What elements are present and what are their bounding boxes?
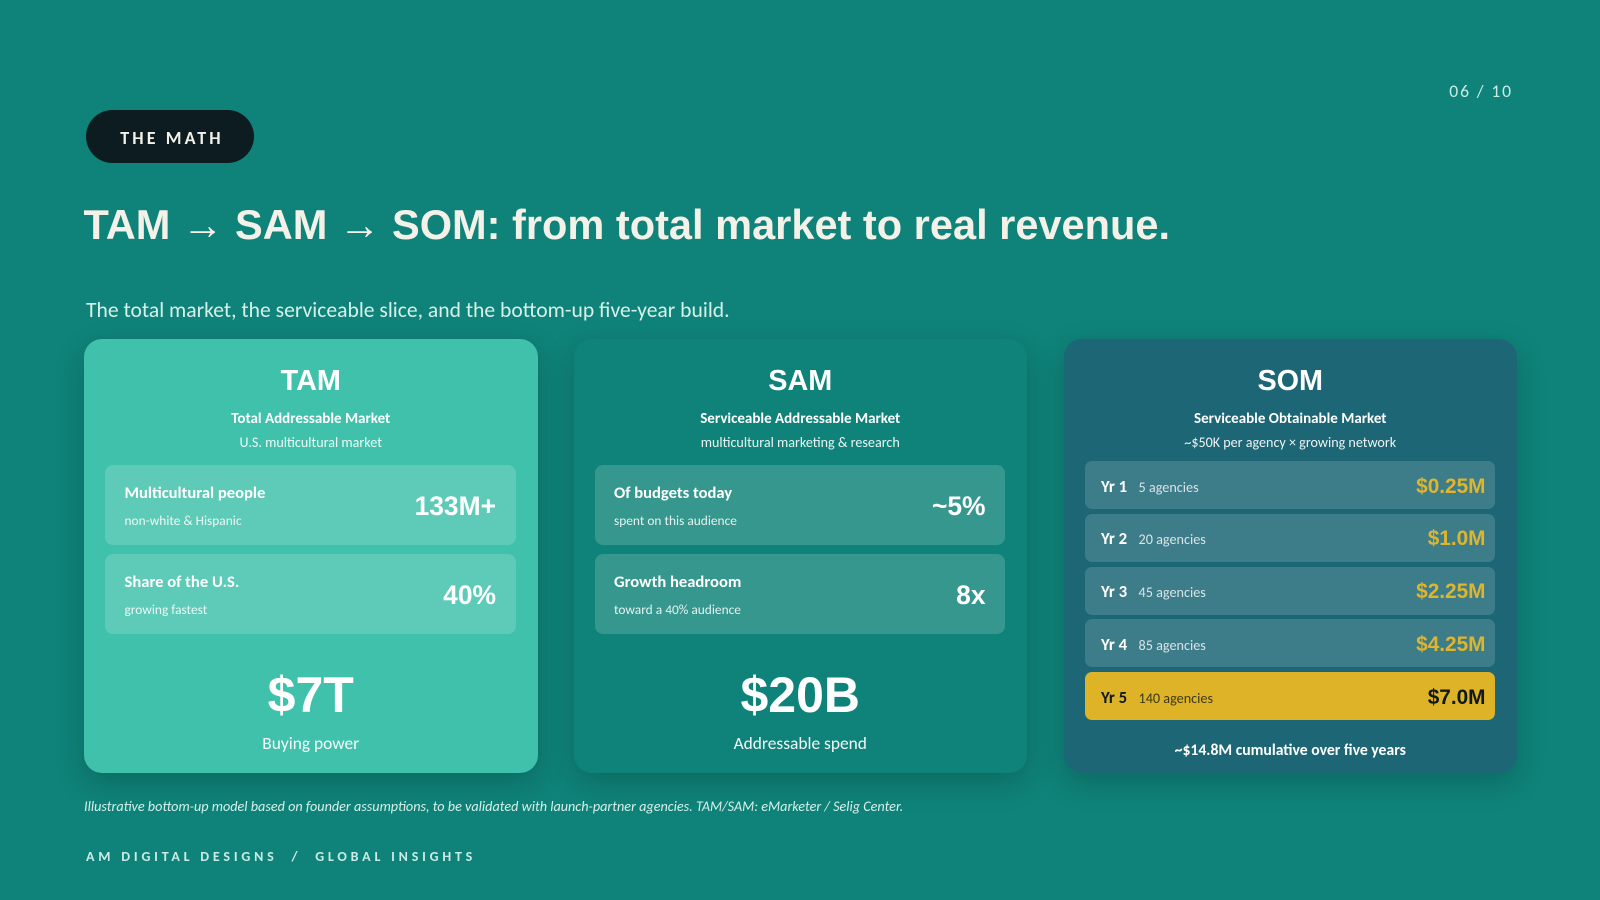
SOM heading: SOM bbox=[1257, 364, 1323, 396]
page number: 06 / 10 bbox=[1449, 80, 1513, 102]
year row 1: 5 agencies bbox=[1138, 478, 1199, 496]
SAM heading: SAM bbox=[768, 364, 832, 396]
footnote: Illustrative bottom-up model based on founder assumptions, to be validated with launch-partner agencies. TAM/SAM: eMarketer / Selig Center. bbox=[84, 797, 903, 815]
TAM heading: TAM bbox=[281, 364, 341, 396]
panel: TAM bbox=[84, 338, 538, 773]
year row 5 highlighted: Yr 5 bbox=[1101, 686, 1127, 708]
year row 2 bbox=[1084, 514, 1495, 562]
year row 1 bbox=[1084, 461, 1495, 509]
stat row: share of the U.S.: 40% bbox=[443, 580, 496, 610]
stat row: growth headroom: 8x bbox=[956, 580, 986, 610]
year row 4: 85 agencies bbox=[1138, 636, 1206, 654]
year row 1: Yr 1 bbox=[1101, 476, 1127, 496]
SAM full name: Serviceable Addressable Market bbox=[700, 410, 900, 428]
year row 5 highlighted: $7.0M bbox=[1428, 686, 1486, 708]
stat row: share of the U.S. bbox=[105, 554, 516, 634]
stat row: budgets today: ~5% bbox=[932, 491, 986, 521]
year row 1: $0.25M bbox=[1416, 474, 1486, 498]
year row 3: Yr 3 bbox=[1101, 581, 1127, 602]
year row 2: Yr 2 bbox=[1101, 528, 1127, 549]
title: TAM → SAM → SOM: from total market to real revenue. bbox=[84, 201, 1170, 248]
stat row: growth headroom: Growth headroom bbox=[614, 572, 741, 592]
stat row: budgets today: Of budgets today bbox=[614, 483, 732, 503]
year row 4: $4.25M bbox=[1416, 633, 1486, 656]
stat row: multicultural people bbox=[105, 465, 516, 545]
stat row: share of the U.S.: growing fastest bbox=[124, 601, 207, 618]
SAM scope: multicultural marketing & research bbox=[701, 434, 900, 450]
stat row: share of the U.S.: Share of the U.S. bbox=[124, 572, 239, 592]
subtitle: The total market, the serviceable slice, and the bottom-up five-year build. bbox=[86, 296, 730, 323]
section pill: THE MATH bbox=[120, 127, 224, 149]
panel: SAM bbox=[574, 338, 1027, 773]
footer brand line: AM DIGITAL DESIGNS / GLOBAL INSIGHTS bbox=[86, 848, 476, 864]
TAM full name: Total Addressable Market bbox=[231, 410, 390, 428]
year row 3: 45 agencies bbox=[1138, 583, 1206, 601]
cumulative total: ~$14.8M cumulative over five years bbox=[1175, 740, 1406, 760]
stat row: budgets today: spent on this audience bbox=[614, 512, 737, 529]
TAM big number: $7T bbox=[268, 666, 354, 722]
SAM big number: $20B bbox=[740, 666, 860, 722]
panel: SOM bbox=[1064, 338, 1517, 773]
stat row: multicultural people: non-white & Hispanic bbox=[124, 512, 241, 529]
year row 4 bbox=[1084, 619, 1495, 667]
TAM caption: Buying power bbox=[262, 732, 359, 754]
year row 3 bbox=[1084, 566, 1495, 614]
SOM full name: Serviceable Obtainable Market bbox=[1194, 410, 1386, 428]
year row 2: 20 agencies bbox=[1138, 530, 1206, 548]
year row 2: $1.0M bbox=[1428, 527, 1486, 550]
stat row: growth headroom: toward a 40% audience bbox=[614, 601, 741, 618]
stat row: budgets today bbox=[594, 465, 1005, 545]
stat row: multicultural people: 133M+ bbox=[415, 491, 496, 521]
year row 5 highlighted: 140 agencies bbox=[1138, 688, 1213, 706]
year row 4: Yr 4 bbox=[1101, 634, 1127, 655]
TAM scope: U.S. multicultural market bbox=[240, 434, 382, 450]
SOM scope: ~$50K per agency × growing network bbox=[1184, 434, 1396, 450]
year row 5 highlighted bbox=[1084, 672, 1495, 720]
SAM caption: Addressable spend bbox=[734, 732, 867, 754]
year row 3: $2.25M bbox=[1416, 580, 1486, 603]
stat row: multicultural people: Multicultural people bbox=[124, 483, 265, 503]
section pill bbox=[86, 110, 254, 163]
stat row: growth headroom bbox=[594, 554, 1005, 634]
